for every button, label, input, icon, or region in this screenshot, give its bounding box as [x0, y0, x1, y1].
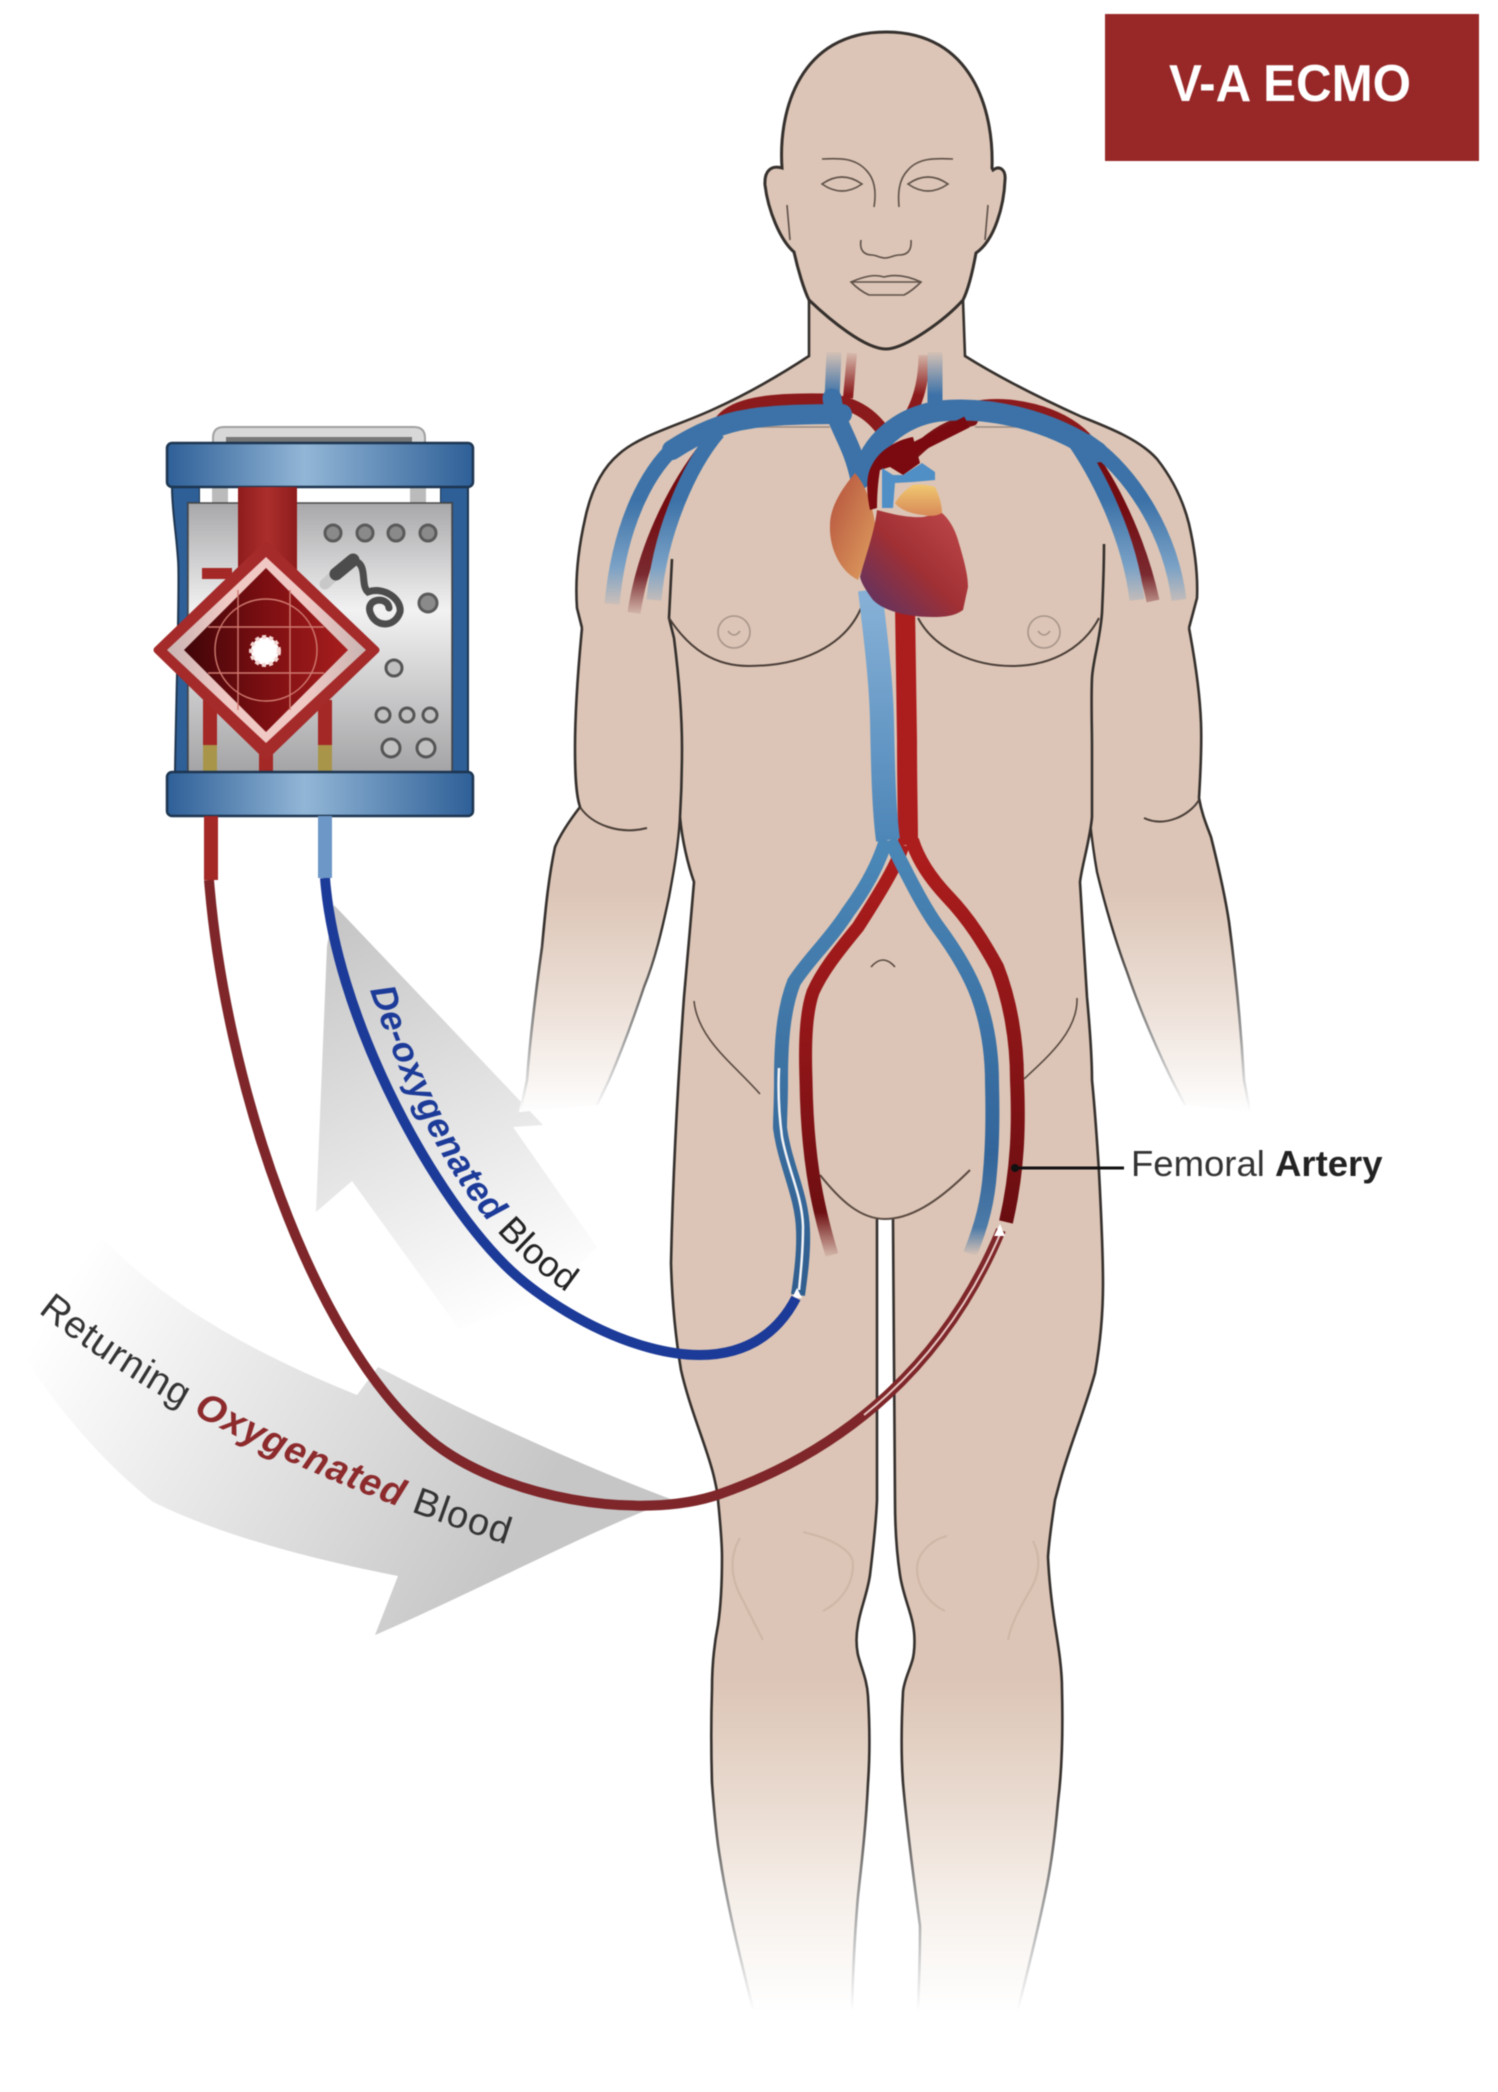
- outlet tubes: [204, 816, 218, 880]
- tube: returning oxygenated blood (red): [209, 880, 1005, 1506]
- heart: [830, 422, 968, 617]
- control panel: [188, 503, 452, 772]
- arteries behind the veins: [634, 353, 1153, 613]
- oxygenator legs: [203, 700, 217, 772]
- arrow: de-oxygenated blood direction: [316, 905, 597, 1329]
- ventricle: [860, 510, 968, 617]
- head: [765, 32, 1005, 349]
- body: torso and legs: [576, 300, 1197, 2009]
- aorta: [867, 437, 920, 510]
- knee details: [732, 1532, 1038, 1640]
- panel dials: [325, 525, 437, 612]
- nipples: [718, 616, 1060, 648]
- oxygenator diamond: [157, 545, 376, 756]
- callout: Femoral Artery: Femoral Artery: [1131, 1143, 1383, 1184]
- neck, shoulder and arm vessels: [612, 352, 1179, 613]
- central great vessels and leg vessels: [780, 590, 1018, 1295]
- veins: [832, 352, 834, 400]
- label: Returning Oxygenated Blood: Returning Oxygenated Blood: [40, 1292, 513, 1544]
- catheter: white venous line in femoral vein: [779, 1068, 803, 1298]
- right atrium: [830, 473, 875, 580]
- title badge: [1105, 14, 1479, 161]
- title badge: V-A ECMO: [1169, 55, 1411, 113]
- coiled cable: [325, 560, 400, 624]
- ECMO machine: [157, 427, 473, 880]
- carry handle: [213, 427, 425, 444]
- pulmonary artery: [882, 463, 935, 508]
- oxygenator core: [251, 637, 279, 665]
- face features: [787, 159, 988, 295]
- callout: Femoral Artery: [1011, 1143, 1383, 1184]
- left atrium: [895, 485, 942, 516]
- right arm: [1060, 459, 1250, 1112]
- arrow: returning oxygenated blood direction: [20, 1237, 673, 1635]
- left arm: [520, 454, 700, 1112]
- label: De-oxygenated Blood: De-oxygenated Blood: [370, 986, 580, 1292]
- bottom bar: [167, 772, 473, 816]
- top bar: [167, 443, 473, 487]
- side posts: [172, 487, 200, 772]
- oxygenator fibres: [208, 590, 324, 710]
- tube: de-oxygenated blood (blue): [325, 878, 796, 1355]
- blood column: [238, 487, 297, 572]
